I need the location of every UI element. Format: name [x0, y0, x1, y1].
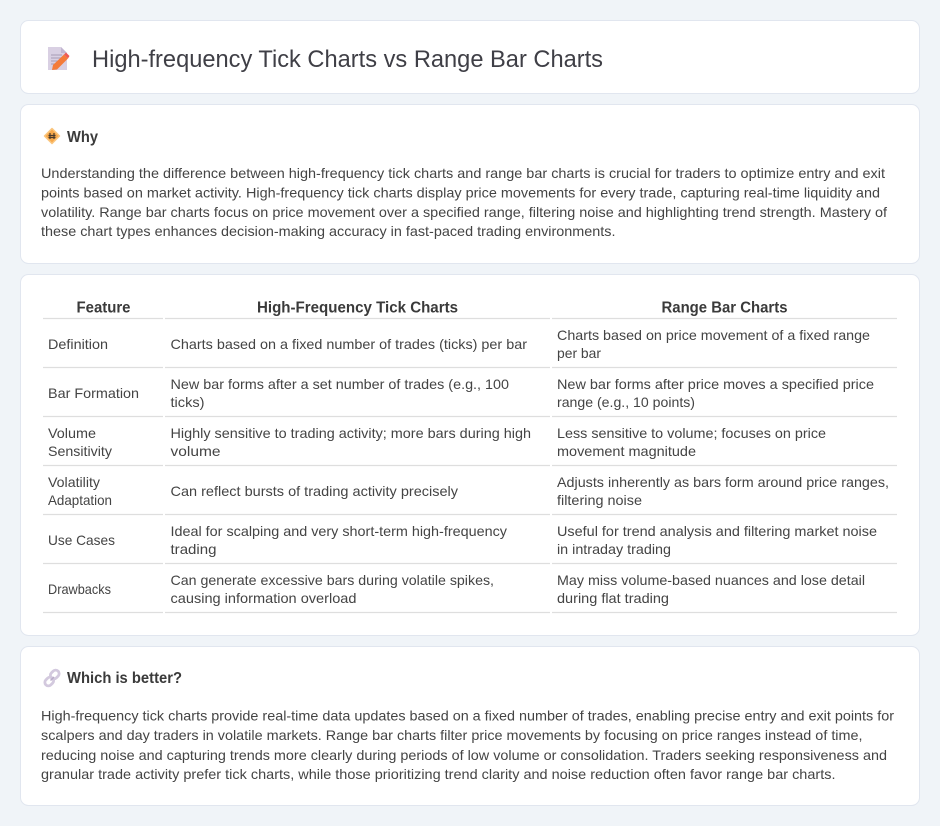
- row: use cases: Use Cases: [48, 532, 115, 548]
- row: definition: Charts based on a fixed number of trades (ticks) per bar: [170, 336, 527, 352]
- row: drawbacks: [48, 572, 865, 606]
- row: drawbacks: Can generate excessive bars during volatile spikes,: [170, 572, 494, 588]
- icon: document with pencil: [48, 47, 70, 70]
- row: definition: Definition: [48, 336, 108, 352]
- table header: High-Frequency Tick Charts: [257, 300, 458, 316]
- heading: why: Why: [67, 129, 98, 146]
- table header: [76, 300, 788, 316]
- panel: title card: [20, 20, 920, 94]
- row: use cases: Useful for trend analysis and filtering market noise: [557, 523, 877, 539]
- table header: Feature: [76, 300, 131, 316]
- row: bar formation: ticks): [170, 394, 204, 410]
- row: volume sensitivity: volume: [170, 443, 221, 459]
- row: drawbacks: Drawbacks: [48, 581, 111, 597]
- panel: comparison table: [20, 274, 920, 636]
- heading: which is better: Which is better?: [67, 670, 182, 687]
- row: definition: Charts based on price movement of a fixed range: [557, 327, 870, 343]
- icon: link: [43, 669, 61, 687]
- row: bar formation: Bar Formation: [48, 385, 139, 401]
- row: definition: [48, 327, 870, 361]
- text block: which is better paragraph: granular trade activity prefer tick charts, while those prioritizing trend clarity and noise reduction often favor range bar charts.: [41, 766, 836, 782]
- row: bar formation: range (e.g., 10 points): [557, 394, 695, 410]
- text block: why paragraph: points based on market activity. High-frequency tick charts display price movements for every trade, capturing real-time liquidity and: [41, 184, 880, 200]
- text block: which is better paragraph: scalpers and day traders in volatile markets. Range bar charts filter price movements by focusing on price ranges instead of time,: [41, 727, 863, 743]
- row: volume sensitivity: Sensitivity: [48, 443, 112, 459]
- row: drawbacks: during flat trading: [557, 590, 669, 606]
- row: use cases: [48, 523, 877, 557]
- row: volatility adaptation: Adaptation: [48, 492, 112, 508]
- row: volume sensitivity: movement magnitude: [557, 443, 696, 459]
- text block: which is better paragraph: [41, 708, 894, 782]
- title: High-frequency Tick Charts vs Range Bar Charts: [92, 46, 603, 73]
- text block: which is better paragraph: High-frequency tick charts provide real-time data updates based on a fixed number of trades, enabling precise entry and exit points for: [41, 708, 894, 724]
- row: use cases: in intraday trading: [557, 541, 671, 557]
- panel: why: [20, 104, 920, 264]
- panel: which is better: [20, 646, 920, 806]
- row: volatility adaptation: Adjusts inherently as bars form around price ranges,: [557, 474, 889, 490]
- row: volatility adaptation: filtering noise: [557, 492, 642, 508]
- row: use cases: trading: [170, 541, 216, 557]
- text block: why paragraph: volatility. Range bar charts focus on price movement over a specified range, filtering noise and highlighting trend strength. Mastery of: [41, 204, 887, 220]
- table header: Range Bar Charts: [662, 300, 788, 316]
- row: volatility adaptation: Volatility: [48, 474, 100, 490]
- text block: which is better paragraph: reducing noise and capturing trends more clearly during periods of low volume or consolidation. Traders seeking responsiveness and: [41, 747, 887, 763]
- row: definition: per bar: [557, 345, 601, 361]
- icon: warning diamond: [44, 128, 60, 144]
- row: volume sensitivity: [48, 425, 826, 459]
- row: use cases: Ideal for scalping and very short-term high-frequency: [170, 523, 507, 539]
- text block: why paragraph: these chart types enhances decision-making accuracy in fast-paced trading environments.: [41, 223, 616, 239]
- row: volatility adaptation: [48, 474, 889, 508]
- row: drawbacks: causing information overload: [170, 590, 356, 606]
- text block: why paragraph: [41, 165, 887, 239]
- row: bar formation: New bar forms after a set number of trades (e.g., 100: [170, 376, 509, 392]
- row: volume sensitivity: Volume: [48, 425, 96, 441]
- row: volume sensitivity: Highly sensitive to trading activity; more bars during high: [170, 425, 531, 441]
- row: bar formation: New bar forms after price moves a specified price: [557, 376, 874, 392]
- row: bar formation: [48, 376, 874, 410]
- row: drawbacks: May miss volume-based nuances and lose detail: [557, 572, 865, 588]
- row: volume sensitivity: Less sensitive to volume; focuses on price: [557, 425, 826, 441]
- text block: why paragraph: Understanding the difference between high-frequency tick charts and range bar charts is crucial for traders to optimize entry and exit: [41, 165, 885, 181]
- row: volatility adaptation: Can reflect bursts of trading activity precisely: [170, 483, 458, 499]
